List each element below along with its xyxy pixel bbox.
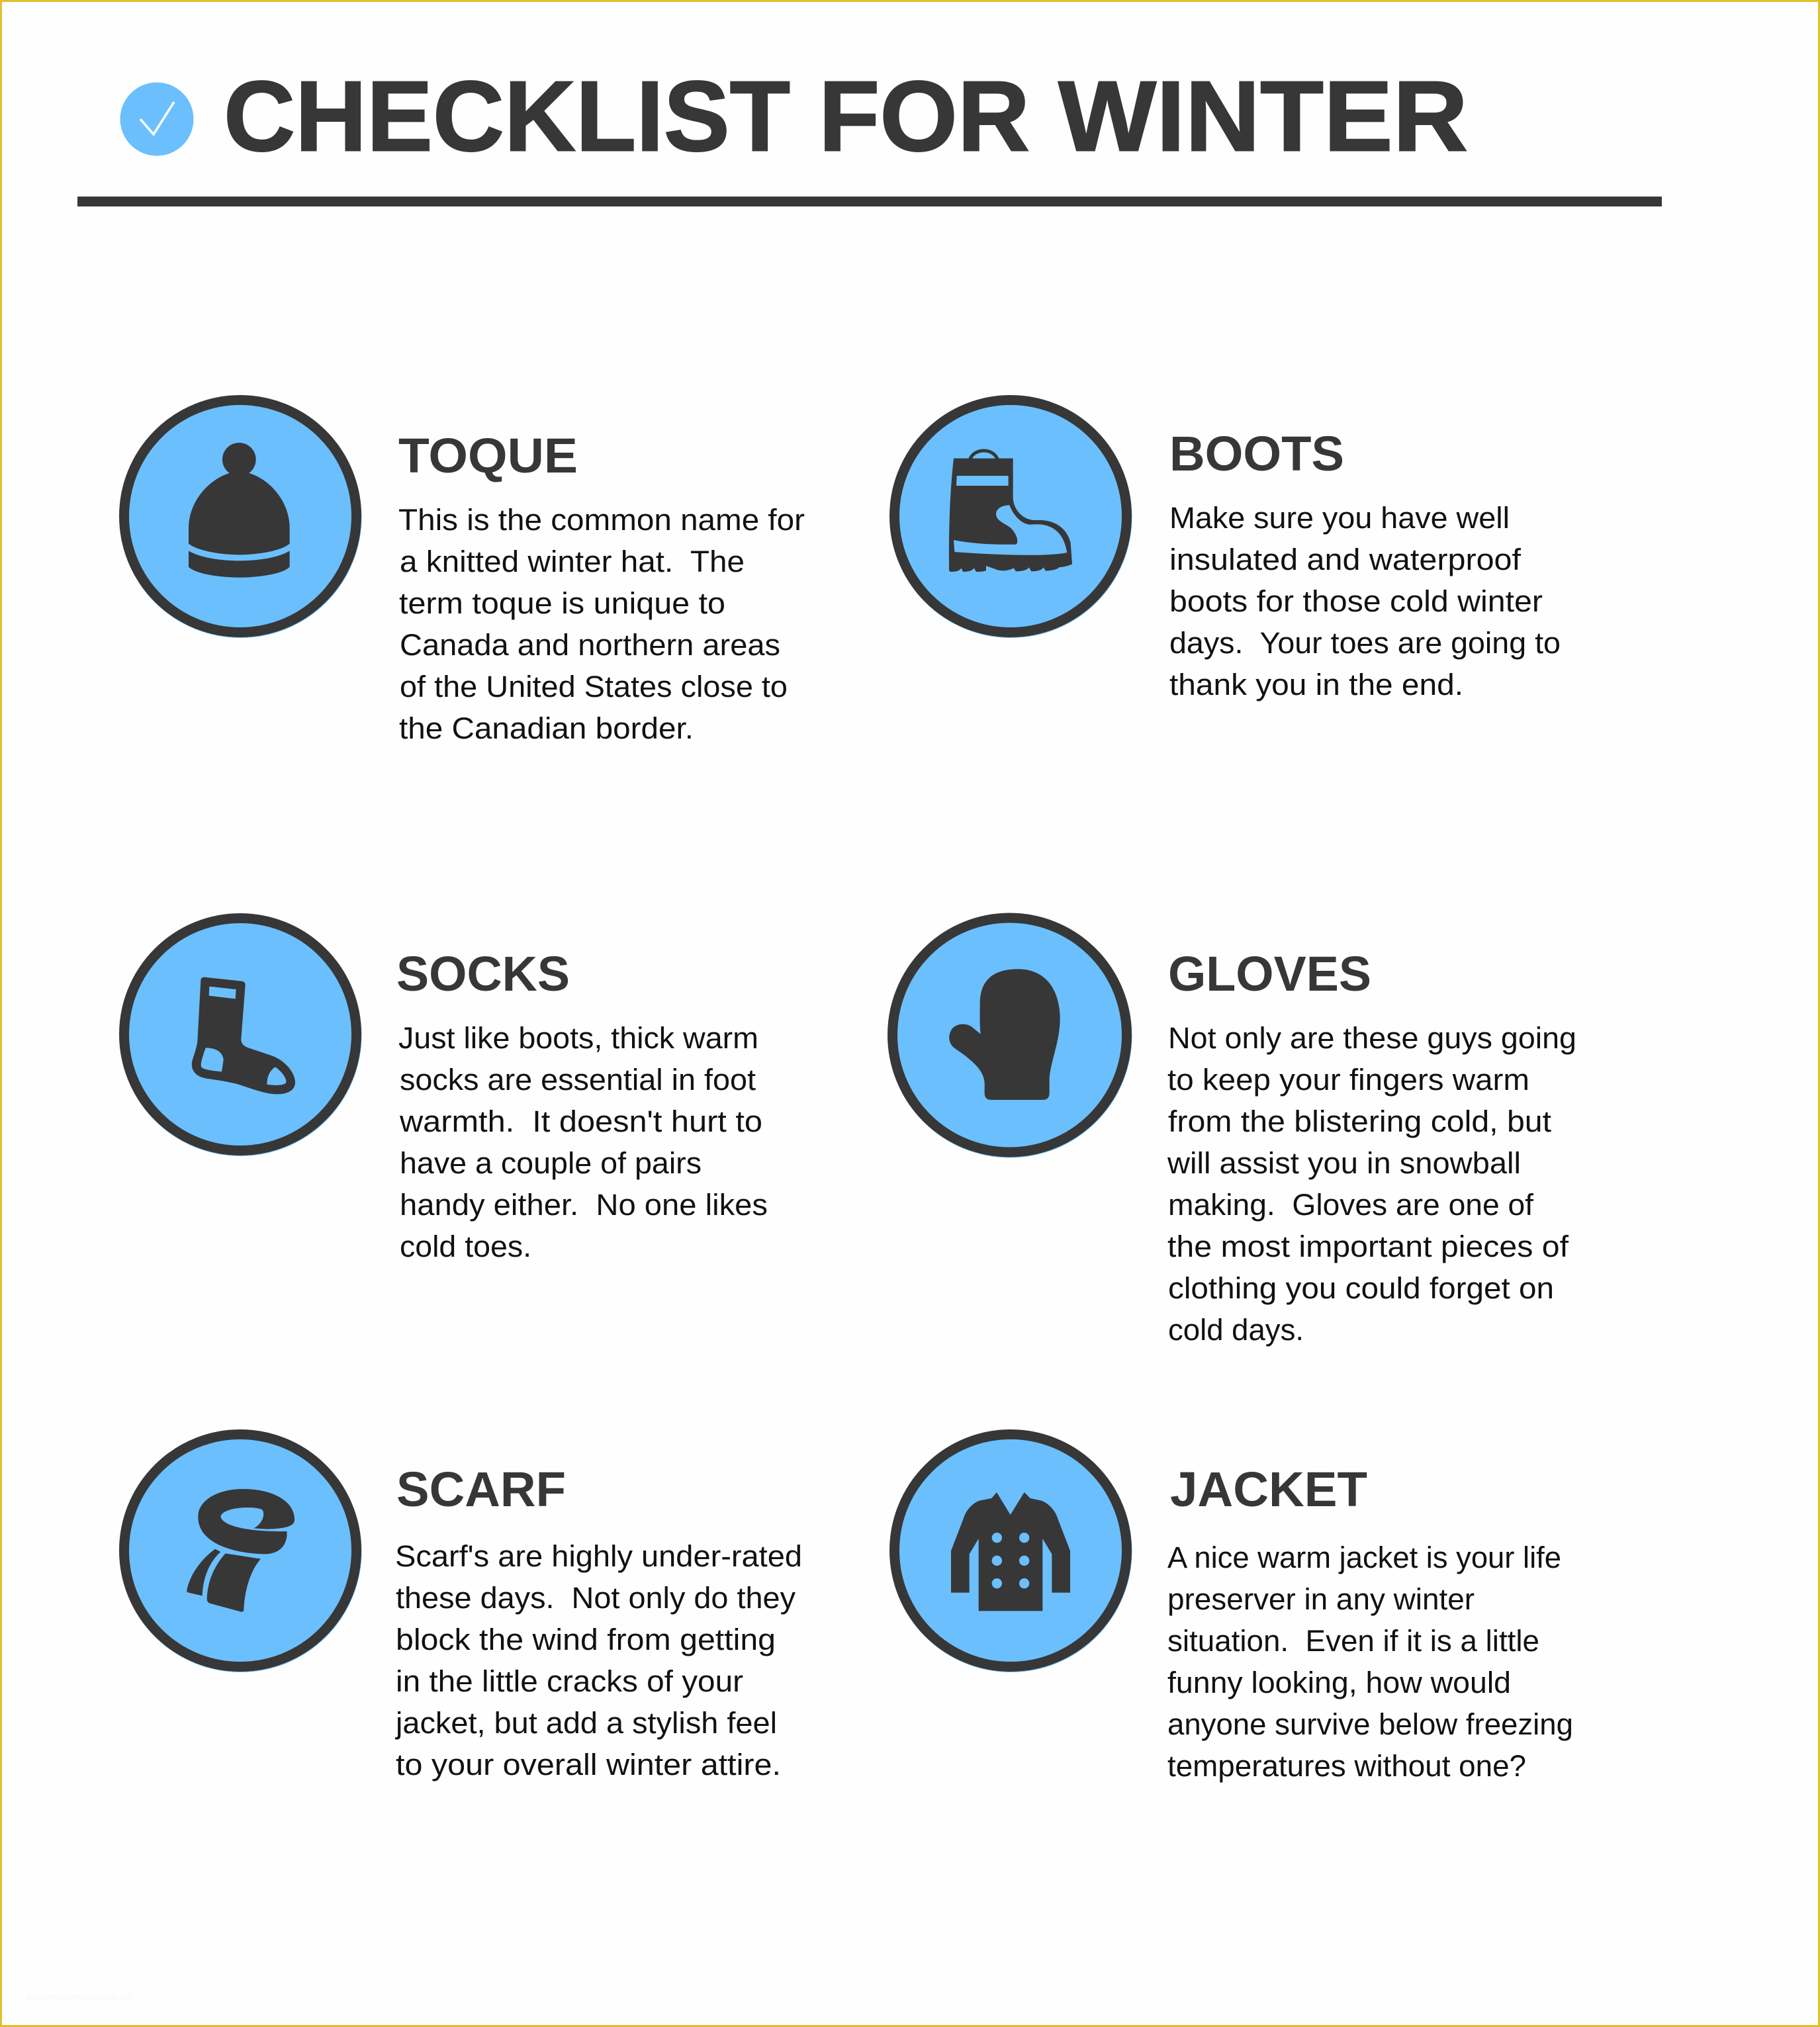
text: scarf description: jacket, but add a stylish feel [394,1706,777,1740]
text: toque description: a knitted winter hat. The [400,545,745,578]
text: jacket description [1167,1541,1573,1783]
icon: toque [119,396,361,638]
header: title with check badge and rule [77,60,1662,206]
title rule [77,197,1662,206]
text: socks description: Just like boots, thick warm [398,1021,758,1055]
text: scarf description: block the wind from getting [396,1623,776,1656]
text: gloves description: clothing you could forget on [1168,1271,1554,1305]
text: boots description: thank you in the end. [1169,668,1463,701]
heading: toque: TOQUE [398,428,578,483]
icon: boots [889,396,1132,638]
panel: gloves [888,913,1576,1347]
watermark: www.heritagechristiancollege.com [26,1992,132,2002]
text: jacket description: funny looking, how would [1167,1666,1511,1699]
icon: jacket [889,1430,1132,1672]
text: scarf description: in the little cracks of your [396,1664,743,1698]
panel: jacket [889,1430,1573,1783]
text: toque description: This is the common name for [398,503,805,537]
text: socks description: handy either. No one likes [400,1188,768,1222]
icon: scarf [119,1430,361,1672]
title: WINTER [1058,60,1468,172]
text: toque description: of the United States close to [400,670,788,703]
text: boots description: days. Your toes are going to [1169,626,1561,660]
heading: socks: SOCKS [396,946,570,1001]
text: boots description: boots for those cold winter [1169,584,1543,618]
icon: check badge [120,82,193,156]
text: socks description: have a couple of pairs [400,1146,702,1180]
text: gloves description: Not only are these guys going [1168,1021,1576,1055]
heading: gloves: GLOVES [1168,946,1371,1001]
text: jacket description: anyone survive below freezing [1167,1707,1573,1741]
text: socks description: socks are essential in foot [400,1063,756,1097]
text: gloves description: the most important pieces of [1167,1230,1569,1263]
text: gloves description: will assist you in snowball [1167,1146,1521,1180]
text: socks description [398,1021,768,1263]
text: socks description: warmth. It doesn't hurt to [399,1104,762,1138]
text: gloves description: from the blistering cold, but [1168,1104,1552,1138]
text: jacket description: temperatures without one? [1167,1749,1526,1783]
text: gloves description: to keep your fingers warm [1167,1063,1529,1097]
text: jacket description: preserver in any winter [1167,1582,1475,1616]
text: gloves description: cold days. [1168,1313,1304,1347]
text: jacket description: A nice warm jacket is your life [1167,1541,1561,1574]
panel: socks [119,914,768,1263]
text: toque description: Canada and northern areas [400,628,780,662]
text: scarf description: these days. Not only do they [396,1581,796,1615]
text: scarf description [394,1539,802,1781]
text: toque description: the Canadian border. [399,711,694,745]
text: boots description [1169,501,1561,701]
text: scarf description: Scarf's are highly under-rated [395,1539,802,1573]
panel: boots [889,396,1561,701]
title [224,60,1468,172]
title: CHECKLIST [224,60,790,172]
text: gloves description [1167,1021,1576,1347]
panel: scarf [119,1430,802,1781]
heading: boots: BOOTS [1169,426,1344,481]
title: FOR [819,60,1030,172]
text: jacket description: situation. Even if it is a little [1167,1624,1539,1658]
heading: scarf: SCARF [396,1462,566,1517]
heading: jacket: JACKET [1170,1462,1367,1517]
text: scarf description: to your overall winter attire. [396,1748,781,1781]
text: boots description: Make sure you have well [1169,501,1510,535]
text: boots description: insulated and waterproof [1169,543,1522,576]
icon: gloves [888,913,1132,1158]
text: gloves description: making. Gloves are one of [1168,1188,1534,1222]
text: toque description [398,503,805,745]
panel: toque [119,396,805,745]
icon: socks [119,914,361,1156]
text: socks description: cold toes. [400,1230,531,1263]
text: toque description: term toque is unique to [399,586,725,620]
